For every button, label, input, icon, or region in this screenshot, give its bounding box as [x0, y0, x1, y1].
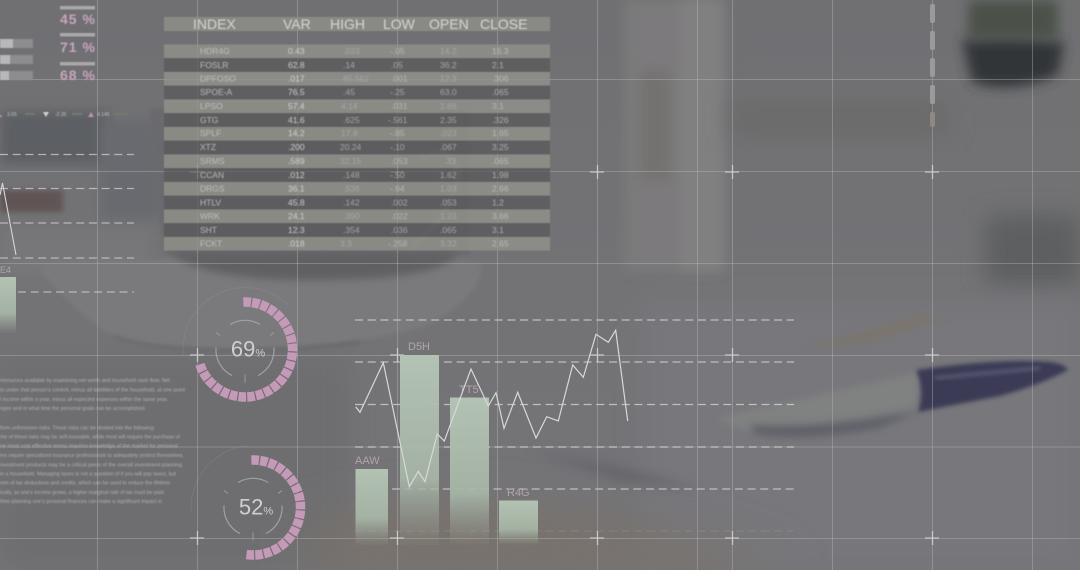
- vertical dashed marker: [930, 4, 935, 127]
- table rows: .589: [288, 156, 305, 166]
- left paragraph text: ne most cost effective terms requires knowledge of the market for personal: [0, 444, 178, 450]
- table rows: 14.2: [440, 46, 457, 56]
- table rows: 3.25: [492, 142, 509, 152]
- table rows: .033: [343, 46, 360, 56]
- table header: OPEN: [429, 16, 469, 32]
- table rows: 1.23: [440, 211, 457, 221]
- left paragraph text: ts under that person's control, minus all liabilities of the household, at one point: [0, 388, 186, 394]
- left paragraph text: [0, 378, 186, 505]
- table rows: WRK: [200, 211, 220, 221]
- left paragraph text: in a household. Managing taxes is not a question of if you will pay taxes, but: [0, 472, 177, 478]
- table header: INDEX: [193, 16, 236, 32]
- table rows: 41.6: [288, 115, 305, 125]
- table rows: -.561: [388, 115, 408, 125]
- table rows: -.64: [390, 184, 405, 194]
- table rows: 24.1: [288, 211, 305, 221]
- table header: VAR: [283, 16, 311, 32]
- stat bars: [0, 39, 33, 80]
- table rows: .390: [343, 211, 360, 221]
- chart bar labels: R4G: [507, 487, 530, 499]
- table rows: .001: [391, 74, 408, 84]
- table rows: HDR4G: [200, 46, 230, 56]
- table rows: -.10: [390, 142, 405, 152]
- chart bar labels: AAW: [355, 455, 380, 467]
- table rows: 1.62: [440, 170, 457, 180]
- left paragraph text: ers require specialized insurance professionals to adequately protect themselves.: [0, 453, 184, 459]
- left paragraph text: ngee and in what time the personal goals can be accomplished.: [0, 406, 146, 412]
- table rows: 3.3: [340, 238, 352, 248]
- table rows: DPFOSO: [200, 74, 236, 84]
- table rows: .065: [492, 87, 509, 97]
- table rows: 85.562: [343, 74, 369, 84]
- table rows: 36.2: [440, 60, 457, 70]
- table rows: 0.43: [288, 46, 305, 56]
- table rows: 62.8: [288, 60, 305, 70]
- table rows: 1.03: [440, 184, 457, 194]
- gauge inner ring: [216, 320, 274, 382]
- table rows: 2.66: [492, 184, 509, 194]
- stat values: 45 %: [60, 11, 96, 27]
- gauge value: 69%: [231, 336, 265, 362]
- table rows: 1.66: [440, 101, 457, 111]
- table rows: 57.4: [288, 101, 305, 111]
- table rows: .625: [343, 115, 360, 125]
- left paragraph text: l income within a year, minus all expected expenses within the same year.: [0, 397, 168, 403]
- table rows: .031: [391, 101, 408, 111]
- left paragraph text: resources available by examining net worth and household cash flow. Net: [0, 378, 171, 384]
- left paragraph text: ically, as one's income grows, a higher marginal rate of tax must be paid.: [0, 490, 165, 496]
- table rows: 12.3: [288, 225, 305, 235]
- table rows: 3.1: [492, 101, 504, 111]
- table rows: .023: [440, 128, 457, 138]
- table rows: 1.65: [492, 128, 509, 138]
- table header: LOW: [383, 16, 416, 32]
- stat values: 68 %: [60, 67, 96, 83]
- table rows: -.25: [390, 87, 405, 97]
- gauge inner ring: [224, 478, 282, 540]
- table rows: -.258: [388, 238, 408, 248]
- table row bands: [164, 17, 550, 250]
- table header: [193, 16, 527, 32]
- gauge: 52%: [191, 446, 302, 557]
- table rows: .200: [288, 142, 305, 152]
- main chart: [355, 320, 794, 545]
- ticker strip: [0, 112, 127, 118]
- table rows: 45.8: [288, 198, 305, 208]
- table rows: .053: [440, 198, 457, 208]
- table rows: FOSLR: [200, 60, 228, 70]
- stat values: 71 %: [60, 39, 96, 55]
- table rows: 4.14: [341, 101, 358, 111]
- table rows: .053: [391, 156, 408, 166]
- table rows: 3.32: [440, 238, 457, 248]
- table rows: XTZ: [200, 142, 216, 152]
- table rows: .018: [288, 238, 305, 248]
- ticker strip: 3.05: [7, 112, 17, 118]
- table rows: 1.98: [492, 170, 509, 180]
- table rows: .148: [343, 170, 360, 180]
- table rows: SPLF: [200, 128, 221, 138]
- table rows: GTG: [200, 115, 218, 125]
- table rows: [200, 46, 509, 248]
- table rows: .002: [391, 198, 408, 208]
- table rows: SRMS: [200, 156, 225, 166]
- stat labels: [60, 6, 95, 66]
- label: E4: E4: [0, 265, 11, 275]
- table rows: .326: [492, 115, 509, 125]
- chart line series: [356, 330, 628, 487]
- table rows: SPOE-A: [200, 87, 232, 97]
- table rows: 15.3: [492, 46, 509, 56]
- table rows: 14.2: [288, 128, 305, 138]
- table rows: .05: [391, 60, 403, 70]
- table rows: HTLV: [200, 198, 221, 208]
- ticker strip: 4.145: [97, 112, 110, 118]
- top-left percentage stats: [0, 6, 96, 83]
- chart bars: [356, 355, 538, 545]
- table rows: -.85: [390, 128, 405, 138]
- table rows: .306: [492, 74, 509, 84]
- table rows: 63.0: [440, 87, 457, 97]
- data table: [164, 16, 550, 250]
- stat values: [60, 11, 96, 83]
- chart bar labels: TT5: [459, 384, 479, 396]
- left paragraph text: nvestment products may be a critical piece of the overall investment planning: [0, 462, 182, 468]
- table rows: 76.5: [288, 87, 305, 97]
- table rows: 12.3: [440, 74, 457, 84]
- left partial chart line: [0, 183, 16, 255]
- background: paper and orange streak: [310, 315, 948, 570]
- table rows: 20.24: [340, 142, 362, 152]
- table rows: FCKT: [200, 238, 222, 248]
- table rows: 36.1: [288, 184, 305, 194]
- table rows: SHT: [200, 225, 217, 235]
- table rows: 3.66: [492, 211, 509, 221]
- left dashed reference lines: [0, 154, 134, 292]
- left paragraph text: me of these risks may be self-insurable, while most will require the purchase of: [0, 434, 181, 440]
- left partial bar with label: [0, 265, 16, 333]
- gauge progress segments: [196, 300, 294, 399]
- table rows: DRGS: [200, 184, 225, 194]
- table rows: .14: [343, 60, 355, 70]
- chart bar labels: [355, 341, 530, 499]
- gauge outer thin ring: [191, 446, 248, 513]
- table rows: .012: [288, 170, 305, 180]
- gauge value: 52%: [239, 494, 273, 520]
- table rows: 32.15: [340, 156, 362, 166]
- table rows: 2.1: [492, 60, 504, 70]
- background: potted plant: [962, 0, 1064, 87]
- table rows: -.05: [390, 46, 405, 56]
- table rows: .45: [343, 87, 355, 97]
- table rows: 17.8: [341, 128, 358, 138]
- table rows: .065: [492, 156, 509, 166]
- table rows: 2.65: [492, 238, 509, 248]
- crosshair markers: [190, 165, 939, 545]
- table rows: .036: [391, 225, 408, 235]
- table rows: CCAN: [200, 170, 224, 180]
- left paragraph text: from unforeseen risks. These risks can be divided into the following:: [0, 426, 155, 432]
- gauge progress segments: [204, 458, 302, 557]
- table rows: .33: [444, 156, 456, 166]
- gauge: 69%: [178, 282, 312, 417]
- background: cup and saucer: [38, 108, 482, 350]
- table rows: 1.2: [492, 198, 504, 208]
- table rows: 3.1: [492, 225, 504, 235]
- table header: CLOSE: [480, 16, 527, 32]
- chart dashed lines: [355, 320, 794, 531]
- table rows: .017: [288, 74, 305, 84]
- table rows: .022: [391, 211, 408, 221]
- table rows: -.50: [390, 170, 405, 180]
- table rows: LPSO: [200, 101, 223, 111]
- table rows: 2.35: [440, 115, 457, 125]
- background: pen: [715, 361, 1068, 437]
- table rows: .354: [343, 225, 360, 235]
- left paragraph text: then planning one's personal finances can make a significant impact in: [0, 499, 162, 505]
- table rows: .142: [343, 198, 360, 208]
- table rows: .536: [343, 184, 360, 194]
- table rows: .067: [440, 142, 457, 152]
- table rows: .065: [440, 225, 457, 235]
- ticker strip: -2.35: [55, 112, 67, 118]
- gauge outer thin ring: [178, 282, 312, 417]
- chart bar labels: D5H: [408, 341, 430, 353]
- left paragraph text: orm of tax deductions and credits, which can be used to reduce the lifetime: [0, 480, 170, 486]
- table header: HIGH: [330, 16, 365, 32]
